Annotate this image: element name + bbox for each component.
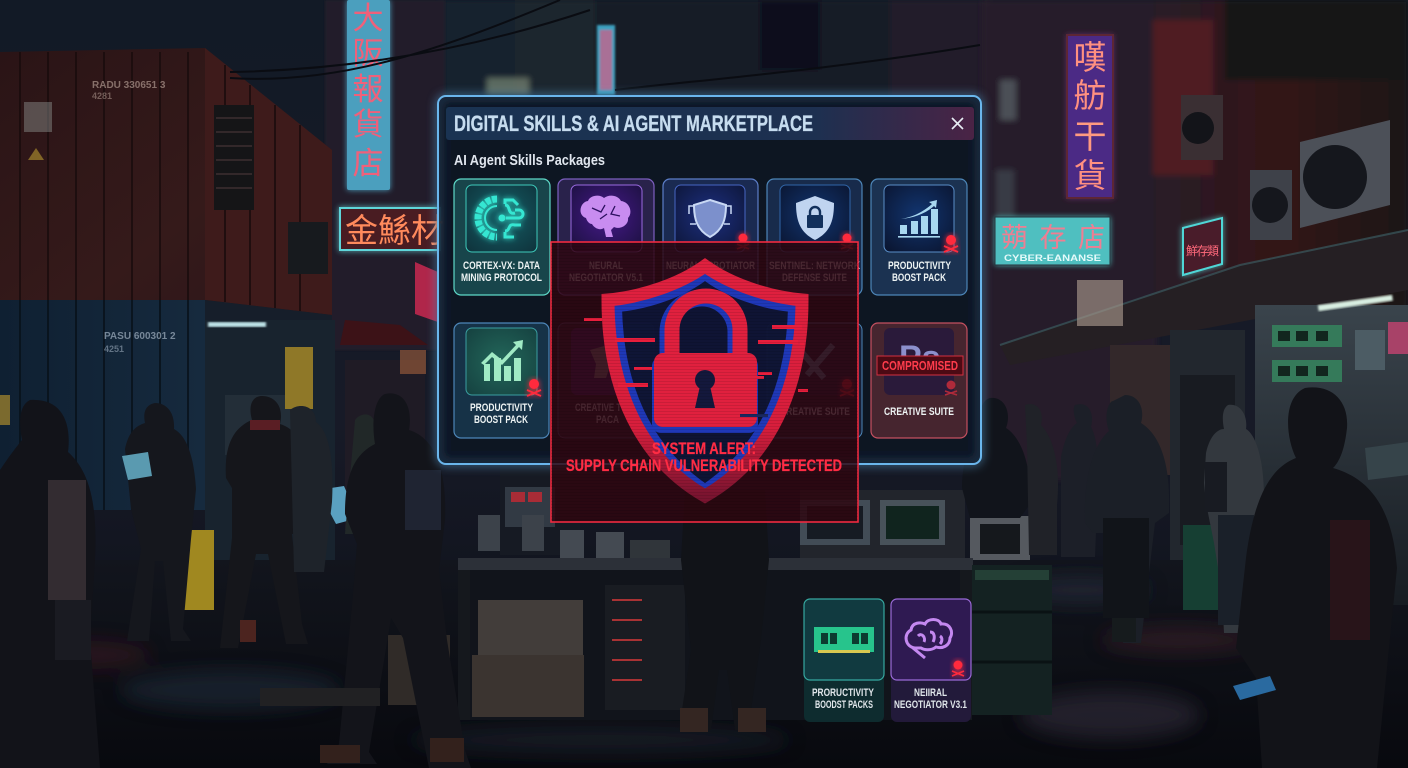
card: Neural Negotiator [663,179,758,295]
panel title: DIGITAL SKILLS & AI AGENT MARKETPLACE [454,111,813,136]
icon: Ps logo: Ps [899,339,941,377]
card: Creative Suite dim: CREATIVE SUITE [780,406,850,418]
background: right alley wall [982,0,1408,480]
market table with gear [388,465,1052,720]
neon sign: purple vertical: 舫 [1074,77,1106,114]
card: Productivity Boost Pack (green) [454,323,549,438]
icon: gear with circuits [478,199,523,237]
card: Neural Negotiator: V.C1 [703,272,716,284]
alert panel [551,242,858,522]
card: Creative Suite compromised [871,323,967,438]
left bottom grate [260,688,380,706]
panel frame [438,96,981,464]
icon: brain [580,196,630,237]
card: Productivity Boost Pack (chart): BOOST PACK [892,272,946,284]
card: Neural Negotiator V5.1 [558,179,654,295]
neon sign: Osaka vertical: 貨 [352,107,384,142]
server rack [605,585,685,710]
shipping container: blue [0,300,332,510]
shipping container: rust red [0,48,332,315]
icon: skull badge [952,660,964,676]
alert text [566,439,842,475]
neon sign: Osaka vertical [347,0,390,190]
shipping container: rust red: 4281 [92,91,112,101]
neon sign: Osaka vertical: 店 [352,146,384,181]
person: man in jacket [220,396,310,648]
neon sign: purple vertical: 嘆 [1074,39,1106,76]
alert shield [584,266,808,496]
card: Creative Suite compromised: CREATIVE SUITE [884,406,954,418]
market card: Productivity Boost Packs: BOODST PACKS [815,699,873,711]
neon sign: gold horizontal: 金鯀材 [345,212,444,249]
card: Sentinel [767,179,862,295]
card: Cortex-VX: CORTEX-VX: DATA [463,260,540,272]
icon: RAM stick [814,627,874,653]
background: central distant towers [440,0,990,100]
market card: Productivity Boost Packs: PRORUCTIVITY [812,687,874,699]
icon: green growth chart [481,340,523,381]
card: Neural Negotiator V5.1: NEURAL [589,260,623,272]
alert padlock [652,296,768,433]
marketplace panel [438,96,981,464]
AC units right wall [1181,95,1390,240]
card: Sentinel: DEFENSE SUITE [782,272,847,284]
market card: Productivity Boost Packs [804,599,884,722]
icon: creative tool [590,346,612,378]
card: Cortex-VX [454,179,550,295]
icon: skull badge [945,380,957,395]
person: far background left [290,406,332,572]
background: ground reflections [30,576,1260,754]
storefront right [1000,230,1408,610]
neon sign: purple vertical [1067,35,1113,198]
section heading: AI Agent Skills Packages [454,152,605,169]
neon sign: cyber teal [995,217,1110,265]
person: back-facing right [1204,405,1264,633]
container code: bottom: PASU 600301 2 [104,331,176,342]
person: hooded walker [1085,395,1169,643]
person: foreground center left [327,393,471,768]
neon sign: Osaka vertical: 報 [352,72,384,107]
neon sign: Osaka vertical: 大 [352,1,384,36]
card: Creative Tool Pack: CREATIVE TOOL [575,402,638,414]
neon sign: small teal angled [1183,218,1222,275]
icon: padlock shield [796,196,834,240]
neon sign: small teal angled: 鮮存類 [1186,244,1219,258]
card: Neural Negotiator V5.1: NEGOTIATOR V5.1 [569,272,643,284]
card: Creative Suite dim [767,323,862,438]
person: woman with tablet [125,403,196,641]
card: Productivity Boost Pack (green): BOOST PACK [474,414,528,426]
background: mid building left [325,0,445,350]
neon sign: purple vertical: 貨 [1074,157,1106,194]
card: Productivity Boost Pack (green): PRODUCTIVITY [470,402,533,414]
market card: Neural Negotiator V3.1 [891,599,971,722]
kiosk interior left [180,320,428,610]
compromised tag: COMPROMISED [882,358,958,373]
person: center vendor [679,490,769,730]
card: Productivity Boost Pack (chart) [871,179,967,295]
overhead cables [230,0,980,90]
person: hooded right [962,398,1030,518]
person: foreground left [0,400,100,768]
icon: skull badge [944,235,958,252]
icon: skull badge [737,234,749,249]
neon sign: purple vertical: 干 [1074,118,1106,155]
card: Creative Tool Pack: PACA [596,414,619,426]
people silhouettes [0,387,1397,768]
system alert overlay [551,242,858,522]
card: Sentinel: SENTINEL: NETWORK [769,260,860,272]
icon: skull badge [840,379,854,396]
glitch streaks [584,318,808,392]
close icon [952,118,963,129]
cardboard boxes [478,600,583,655]
panel header bar [446,107,974,140]
card: Productivity Boost Pack (chart): PRODUCTIVITY [888,260,951,272]
neon sign: cyber teal: CYBER-EANANSE [1004,253,1101,264]
crates right [972,565,1052,715]
neon sign: top center [597,25,615,95]
icon: skull badge [841,234,853,249]
alert text: SUPPLY CHAIN VULNERABILITY DETECTED [566,456,842,475]
neon sign: cyber teal: 蒴存店 [1001,223,1105,253]
icon: bar chart with arrow [898,200,940,238]
card: Cortex-VX: MINING PROTOCOL [461,272,542,284]
neon sign: Osaka vertical: 阪 [352,36,384,71]
person: foreground right [1236,387,1397,768]
alert text: SYSTEM ALERT: [652,439,756,458]
icon: circuit shield [694,200,726,237]
card: Creative Tool Pack [558,323,654,438]
market card: Neural Negotiator V3.1: NEIIRAL [914,687,947,699]
market card: Neural Negotiator V3.1: NEGOTIATOR V3.1 [894,699,967,711]
icon: crossed tools [800,345,833,378]
shipping container: blue: 4251 [104,344,124,354]
background: wet ground [0,560,1408,768]
container code: top: RADU 330651 3 [92,80,166,91]
icon: skull badge [527,379,541,396]
card: Neural Negotiator: NEURAL RPBOTIATOR [666,260,755,272]
RAM modules on shop wall [1272,325,1342,382]
icon: neon brain [906,620,952,658]
neon sign: small pink [415,262,438,322]
